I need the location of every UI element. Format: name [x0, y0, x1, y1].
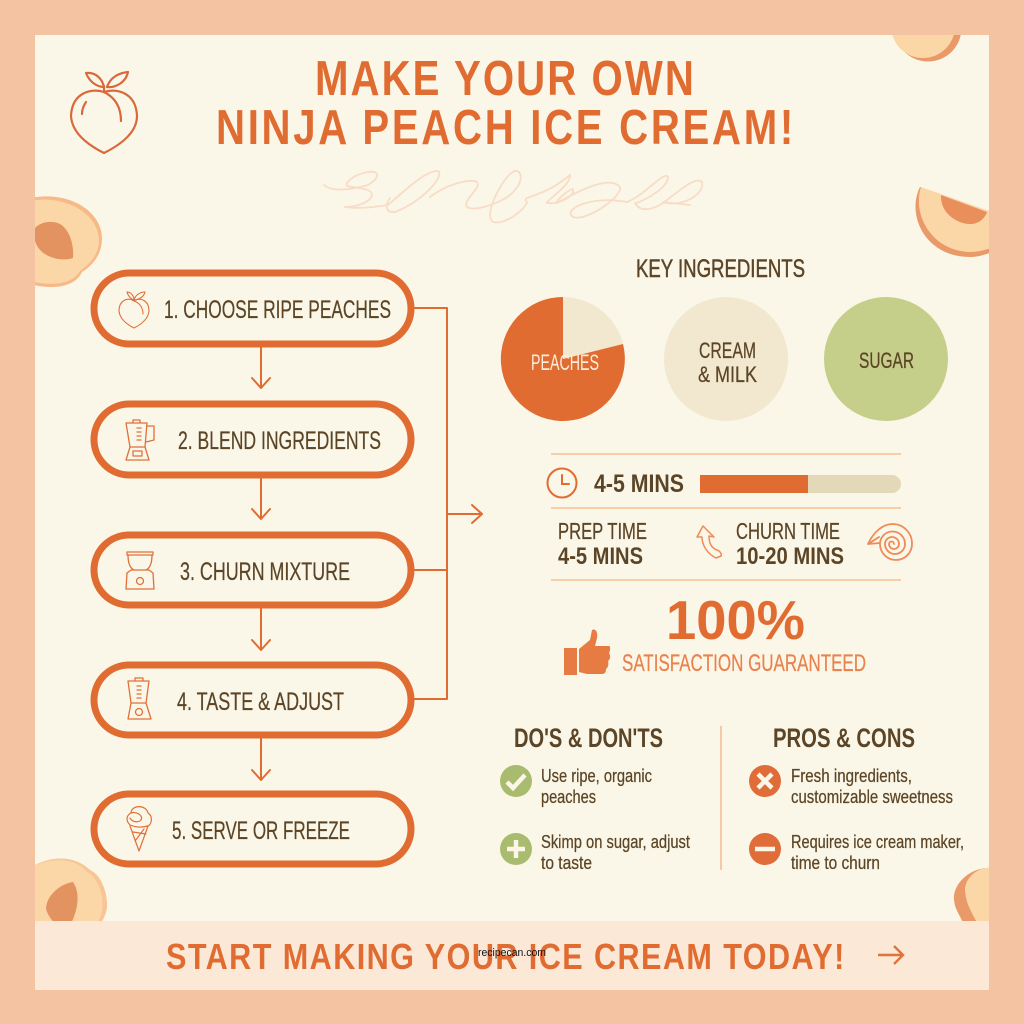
pros and cons: Fresh ingredients, [791, 765, 912, 786]
step 5 [94, 794, 411, 864]
step 3: 3. CHURN MIXTURE [180, 558, 350, 586]
do's and don'ts: to taste [541, 852, 592, 873]
step 5: 5. SERVE OR FREEZE [172, 817, 350, 845]
icon: curved arrow [697, 526, 721, 558]
divider lines [551, 454, 901, 580]
stat: 100 percent: 100% [666, 589, 805, 651]
ingredient: sugar: SUGAR [859, 348, 914, 373]
satisfaction guaranteed: SATISFACTION GUARANTEED [622, 650, 866, 677]
do's and don'ts: Use ripe, organic [541, 765, 652, 786]
icon: peach [119, 292, 149, 328]
prep time: 4-5 MINS [558, 543, 643, 570]
icon: swirl [868, 524, 912, 560]
icon: peach logo [71, 72, 137, 153]
footer banner: START MAKING YOUR ICE CREAM TODAY! [166, 938, 844, 978]
churn time: 10-20 MINS [736, 543, 844, 570]
icon: arrow [878, 946, 903, 964]
do's and don'ts: peaches [541, 786, 596, 807]
icon: thumbs up [564, 630, 610, 675]
ingredient: cream and milk [664, 297, 788, 421]
step 1: 1. CHOOSE RIPE PEACHES [164, 296, 391, 324]
pros and cons [749, 723, 964, 873]
icon: blender [126, 420, 154, 460]
pros and cons: Requires ice cream maker, [791, 831, 964, 852]
ingredient: cream and milk: CREAM [699, 338, 756, 363]
key ingredients heading: KEY INGREDIENTS [636, 255, 805, 283]
prep time: PREP TIME [558, 518, 647, 544]
pros and cons: PROS & CONS [773, 723, 915, 753]
step 4 [94, 665, 411, 735]
title [216, 51, 793, 155]
decorative script flourish [324, 171, 702, 222]
time bar row [548, 468, 901, 498]
churn time [736, 518, 844, 570]
title: MAKE YOUR OWN [315, 51, 694, 106]
step 4: 4. TASTE & ADJUST [177, 688, 344, 716]
step 2 [94, 404, 411, 475]
do's and don'ts: Skimp on sugar, adjust [541, 831, 690, 852]
icon: plus [500, 833, 532, 865]
step 2: 2. BLEND INGREDIENTS [178, 427, 381, 455]
footer banner [35, 921, 989, 990]
flow connector lines and arrows [252, 308, 482, 780]
icon: x mark [749, 765, 781, 797]
icon: clock [548, 468, 576, 498]
ingredient: peaches pie: PEACHES [531, 350, 599, 375]
icon: churn machine [126, 552, 154, 589]
icon: tall blender [128, 678, 151, 719]
icon: check [500, 765, 532, 797]
ingredient: peaches pie [501, 297, 625, 421]
pros and cons: customizable sweetness [791, 786, 953, 807]
pros and cons: time to churn [791, 852, 880, 873]
watermark: recipecan.com [478, 947, 546, 959]
step 1 [94, 273, 411, 344]
center divider [720, 726, 722, 870]
do's and don'ts [500, 723, 690, 873]
do's and don'ts: DO'S & DON'TS [514, 723, 663, 753]
time bar row: 4-5 MINS [594, 470, 684, 498]
ingredient: cream and milk: & MILK [698, 362, 757, 387]
prep time [558, 518, 647, 570]
ingredient: sugar [824, 297, 948, 421]
churn time: CHURN TIME [736, 518, 840, 544]
title: NINJA PEACH ICE CREAM! [216, 100, 793, 155]
icon: minus [749, 833, 781, 865]
icon: ice cream cone [127, 807, 151, 851]
step 3 [94, 535, 411, 605]
